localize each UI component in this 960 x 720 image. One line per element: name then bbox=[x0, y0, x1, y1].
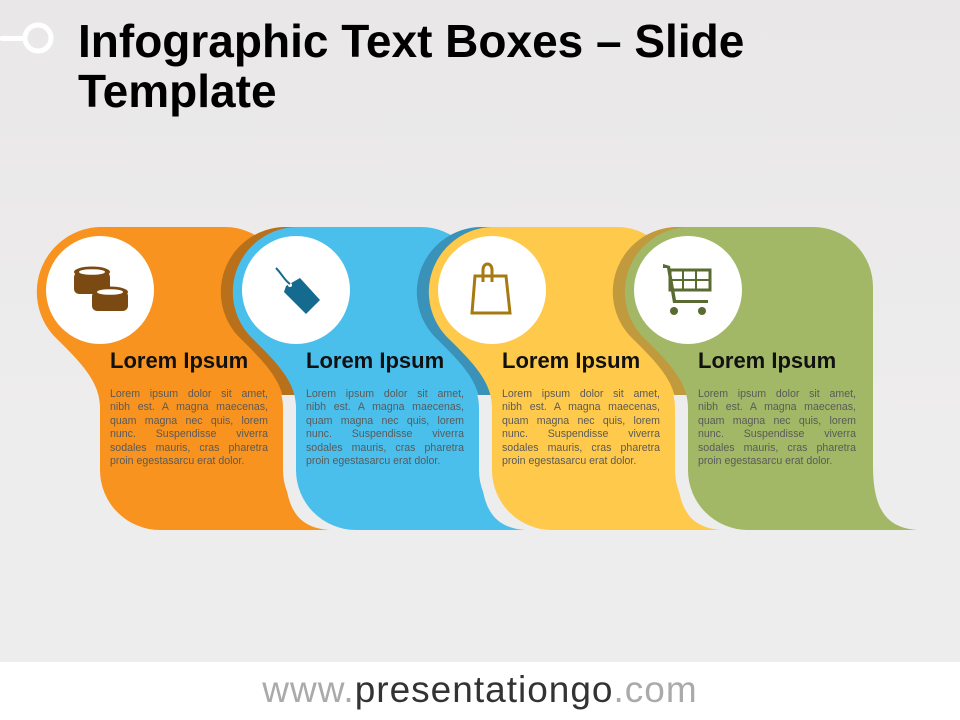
text: sodales mauris, cras pharetra bbox=[502, 442, 660, 454]
text: sodales mauris, cras pharetra bbox=[110, 442, 268, 454]
text: nunc. Suspendisse viverra bbox=[698, 428, 856, 440]
text: proin egestasarcu erat dolor. bbox=[110, 455, 244, 467]
logo icon bbox=[0, 22, 54, 54]
text: Lorem ipsum dolor sit amet, bbox=[306, 388, 464, 400]
title: Infographic Text Boxes – Slide bbox=[78, 15, 744, 67]
text: nibh est. A magna maecenas, bbox=[110, 401, 268, 413]
text: Lorem ipsum dolor sit amet, bbox=[698, 388, 856, 400]
text: Lorem Ipsum bbox=[502, 348, 640, 373]
text: nibh est. A magna maecenas, bbox=[306, 401, 464, 413]
text: Lorem ipsum dolor sit amet, bbox=[110, 388, 268, 400]
footer: www.presentationgo.com bbox=[262, 669, 698, 710]
text: quam magna nec quis, lorem bbox=[698, 415, 856, 427]
text: sodales mauris, cras pharetra bbox=[306, 442, 464, 454]
text: proin egestasarcu erat dolor. bbox=[698, 455, 832, 467]
text: sodales mauris, cras pharetra bbox=[698, 442, 856, 454]
icon: coins bbox=[74, 266, 128, 311]
text: Lorem Ipsum bbox=[698, 348, 836, 373]
footer bbox=[0, 662, 960, 720]
title bbox=[78, 15, 744, 117]
text: Lorem Ipsum bbox=[306, 348, 444, 373]
text: quam magna nec quis, lorem bbox=[110, 415, 268, 427]
icon: tag bbox=[276, 268, 320, 314]
text: quam magna nec quis, lorem bbox=[502, 415, 660, 427]
text: Lorem Ipsum bbox=[110, 348, 248, 373]
title: Template bbox=[78, 65, 277, 117]
text: nunc. Suspendisse viverra bbox=[110, 428, 268, 440]
text: nunc. Suspendisse viverra bbox=[502, 428, 660, 440]
text: nibh est. A magna maecenas, bbox=[502, 401, 660, 413]
panel 4 text bbox=[698, 348, 856, 467]
shape 4 green bbox=[612, 227, 918, 530]
text: nunc. Suspendisse viverra bbox=[306, 428, 464, 440]
shape 2 blue bbox=[220, 227, 526, 530]
icon: cart bbox=[663, 264, 710, 315]
icon: shopping bag bbox=[472, 264, 510, 313]
text: nibh est. A magna maecenas, bbox=[698, 401, 856, 413]
text: quam magna nec quis, lorem bbox=[306, 415, 464, 427]
text: proin egestasarcu erat dolor. bbox=[502, 455, 636, 467]
panel 3 text bbox=[502, 348, 660, 467]
text: proin egestasarcu erat dolor. bbox=[306, 455, 440, 467]
shape 3 yellow bbox=[416, 227, 722, 530]
text: Lorem ipsum dolor sit amet, bbox=[502, 388, 660, 400]
panel 1 text bbox=[110, 348, 268, 467]
shape 1 orange bbox=[37, 227, 330, 530]
panel 2 text bbox=[306, 348, 464, 467]
diagram: four text box shapes bbox=[36, 227, 918, 530]
